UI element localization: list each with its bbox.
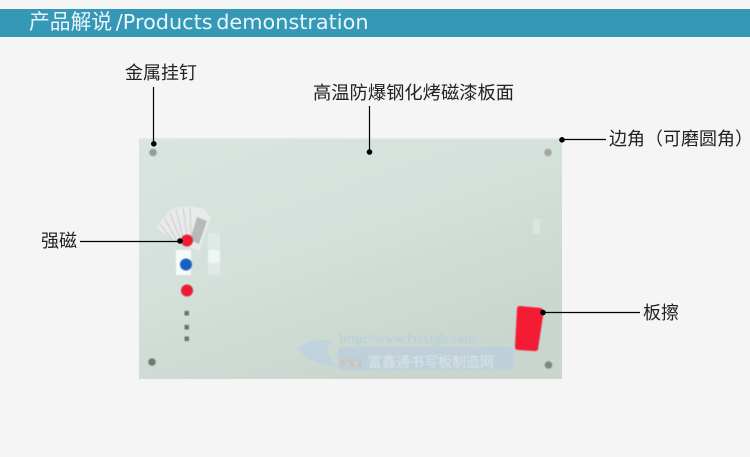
leader: strong magnet — [80, 238, 183, 244]
reflections on the glass — [176, 219, 540, 275]
metal nail: bottom left — [148, 358, 156, 366]
leader: eraser — [540, 310, 640, 315]
small square magnets — [184, 311, 189, 341]
header bar — [0, 9, 750, 37]
label: board surface: 高温防爆钢化烤磁漆板面 — [313, 82, 514, 103]
watermark: http://www.fxtxtgb.com — [339, 331, 476, 346]
title: 产品解说 /Products demonstration — [29, 10, 368, 34]
leader: metal nail — [151, 87, 157, 147]
label: strong magnet: 强磁 — [41, 231, 77, 251]
watermark: 富鑫通书写板制造网 — [368, 354, 494, 370]
metal nail: top left — [149, 149, 157, 156]
metal nail: bottom right — [545, 361, 552, 369]
label: metal nail: 金属挂钉 — [125, 63, 197, 83]
business cards — [156, 206, 211, 251]
leader: board surface — [367, 106, 372, 155]
red magnet with cards — [181, 234, 193, 246]
label: corner: 边角（可磨圆角） — [609, 129, 750, 149]
red magnet — [181, 284, 193, 296]
leader: corner — [559, 137, 606, 143]
metal nail: top right — [544, 149, 552, 156]
blue magnet — [180, 258, 192, 270]
watermark: FXT — [340, 356, 364, 370]
watermark — [297, 331, 514, 370]
label: eraser: 板擦 — [643, 303, 679, 323]
red eraser — [515, 306, 544, 351]
glass whiteboard — [139, 138, 562, 379]
